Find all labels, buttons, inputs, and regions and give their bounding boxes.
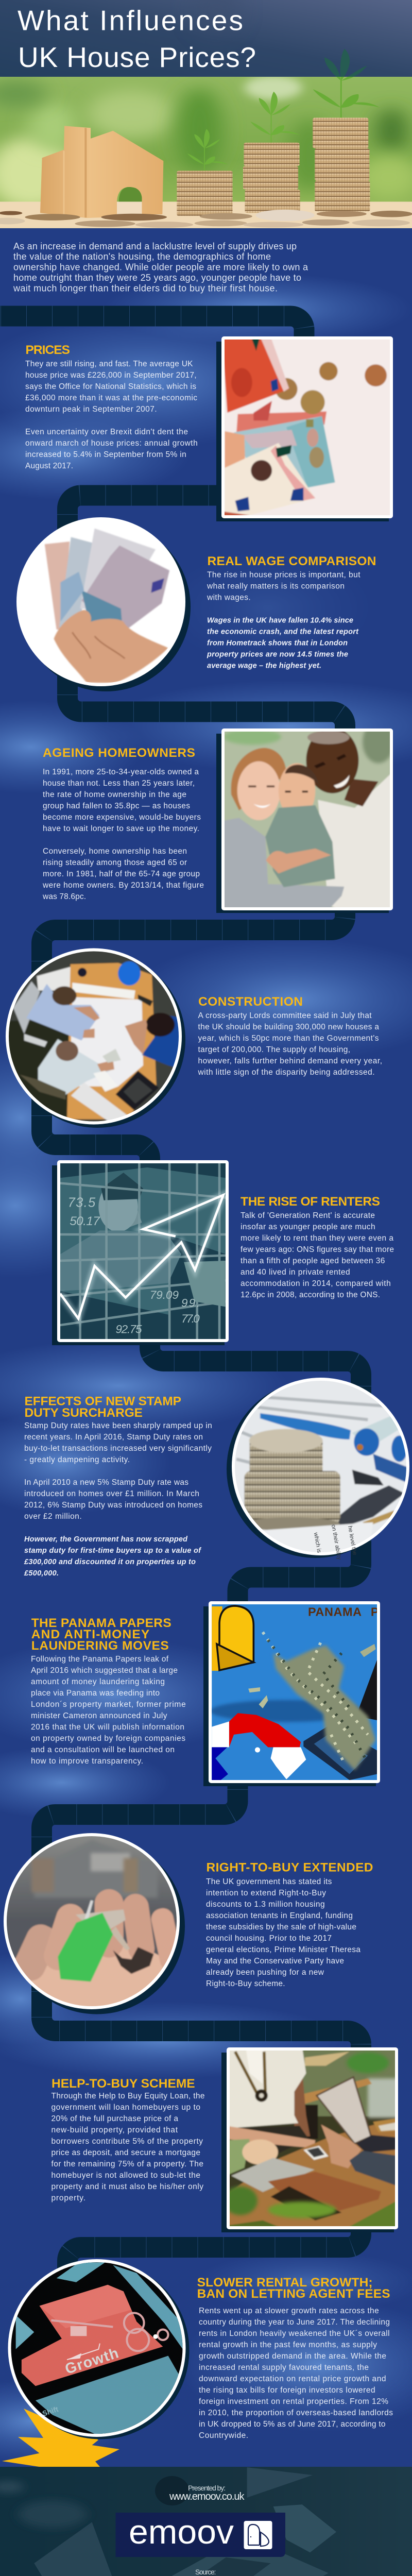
text block: prices: onward march of house prices: annual growth (25, 439, 198, 448)
text block: right-to-buy extended: intention to extend Right-to-Buy (206, 1889, 326, 1897)
heading: ageing homeowners: AGEING HOMEOWNERS (43, 746, 195, 760)
text block: stamp duty: recent years. In April 2016, Stamp Duty rates on (24, 1433, 203, 1442)
text block: ageing homeowners (42, 768, 204, 901)
text block: panama papers: on property owned by foreign companies (31, 1734, 185, 1743)
panel: right-to-buy extended (0, 1829, 373, 2024)
text block: prices: downturn peak in September 2007. (25, 405, 157, 414)
text block: construction: with little sign of the disparity being addressed. (198, 1068, 375, 1077)
heading: help-to-buy scheme: HELP-TO-BUY SCHEME (52, 2077, 195, 2091)
text block: prices: August 2017. (25, 462, 73, 470)
text block: prices: house price was £226,000 in September 2017, (25, 371, 197, 380)
text block: right-to-buy extended (206, 1877, 360, 1988)
text block: help-to-buy scheme: property. (52, 2194, 85, 2202)
text block: stamp duty: However, the Government has now scrapped (24, 1535, 188, 1544)
heading: panama papers: LAUNDERING MOVES (31, 1639, 169, 1653)
logo: emoov (115, 2513, 285, 2557)
text block: ageing homeowners: house than not. Less than 25 years later, (43, 779, 195, 788)
text block: panama papers: amount of money laundering taking (31, 1677, 165, 1686)
intro text: wait much longer than their elders did to buy their first house. (13, 283, 278, 294)
text block: stamp duty: introduced on homes over £1 million. In March (24, 1489, 199, 1498)
text block: panama papers: how to improve transparency. (31, 1757, 143, 1766)
intro text: ownership have changed. While older people are more likely to own a (13, 262, 308, 272)
text block: the rise of renters: more likely to rent than they were even a (241, 1234, 393, 1243)
text block: real wage comparison: from Hometrack shows that in London (207, 639, 348, 647)
text block: help-to-buy scheme: borrowers contribute 5% of the property (52, 2137, 203, 2146)
text block: right-to-buy extended: May and the Conservative Party have (206, 1957, 344, 1965)
text block: real wage comparison: Wages in the UK have fallen 10.4% since (207, 616, 353, 624)
source list: Source: (195, 2568, 216, 2576)
text block: help-to-buy scheme: price as deposit, and secure a mortgage (52, 2148, 200, 2157)
heading: right-to-buy extended: RIGHT-TO-BUY EXTENDED (206, 1861, 373, 1875)
title: UK House Prices? (18, 41, 256, 73)
caption fragments on paper: he level the (347, 1526, 358, 1555)
text block: stamp duty: over £2 million. (24, 1512, 82, 1521)
heading: stamp duty: DUTY SURCHARGE (25, 1406, 143, 1420)
text block: panama papers: 2016 that the UK will publish information (31, 1723, 184, 1732)
text block: construction (198, 1011, 382, 1077)
text block: slower rental growth: increased rental supply favoured tenants, the (199, 2363, 369, 2372)
intro text: As an increase in demand and a lacklustre level of supply drives up (13, 241, 297, 251)
text block: slower rental growth: downward expectation on rental price growth and (199, 2375, 386, 2383)
image: architects around a table (0, 944, 189, 1131)
panel: construction (0, 944, 382, 1131)
image: hand holding house keys (0, 1829, 186, 2024)
text block: stamp duty: - greatly dampening activity. (24, 1455, 130, 1464)
image: growth key on keyboard: Growth (63, 2345, 121, 2378)
image: hand holding euro notes (16, 517, 191, 691)
presented by text (169, 2484, 245, 2502)
presented by text: Presented by: (188, 2484, 226, 2492)
panel: prices (25, 336, 393, 521)
text block: prices: increased to 5.4% in September from 5% in (25, 450, 186, 459)
title: What Influences (18, 4, 243, 36)
text block: prices: £36,000 more than it was at the pre-economic (25, 394, 197, 402)
text block: panama papers: London´s property market, former prime (31, 1700, 186, 1709)
text block: the rise of renters: and 40 lived in private rented (241, 1268, 350, 1277)
image: coin stack and pens (226, 1370, 412, 1562)
image: man with stock chart and rising arrow: 77.0 (181, 1312, 200, 1325)
text block: the rise of renters: insofar as younger people are much (241, 1223, 375, 1231)
text block: help-to-buy scheme: government will loan homebuyers up to (52, 2103, 200, 2112)
intro text: the value of the nation's housing, the demographics of home (13, 251, 271, 262)
image: man with stock chart and rising arrow: 99. (181, 1296, 200, 1309)
heading: slower rental growth (197, 2276, 390, 2301)
heading: panama papers: THE PANAMA PAPERS (31, 1616, 171, 1630)
image: euro notes and coins (216, 336, 393, 521)
text block: construction: however, falls further behind demand every year, (198, 1057, 382, 1065)
image: growth key on keyboard: Shift (41, 2405, 60, 2418)
image: growth key on keyboard (5, 2257, 189, 2441)
text block: stamp duty: Stamp Duty rates have been sharply ramped up in (24, 1421, 212, 1430)
starburst badge (2, 2409, 119, 2467)
title band (0, 0, 412, 77)
text block: help-to-buy scheme: property and it must also be his/her only (52, 2182, 203, 2191)
text block: stamp duty: In April 2010 a new 5% Stamp Duty rate was (24, 1478, 188, 1487)
heading: stamp duty: EFFECTS OF NEW STAMP (25, 1394, 181, 1409)
panel: help-to-buy scheme (52, 2047, 400, 2232)
text block: stamp duty: £500,000. (24, 1569, 59, 1578)
text block: construction: the UK should be building 300,000 new houses a (198, 1023, 379, 1031)
text block: help-to-buy scheme: 20% of the full purchase price of a (52, 2114, 178, 2123)
text block: right-to-buy extended: Right-to-Buy scheme. (206, 1979, 285, 1988)
panel: ageing homeowners (42, 721, 394, 913)
text block: the rise of renters: 12.6pc in 2008, according to the ONS. (241, 1291, 380, 1299)
text block: panama papers: April 2016 which suggested that a large (31, 1666, 178, 1675)
text block: the rise of renters (241, 1211, 394, 1299)
text block: help-to-buy scheme: Through the Help to Buy Equity Loan, the (52, 2092, 205, 2100)
text block: slower rental growth: rents in London heavily weakened the UK´s overall (199, 2329, 390, 2338)
text block: slower rental growth: in UK dropped to 5% as of June 2017, according to (199, 2420, 385, 2429)
text block: panama papers: Following the Panama Papers leak of (31, 1655, 169, 1664)
text block: ageing homeowners: the rate of home ownership in the age (43, 790, 186, 799)
heading: real wage comparison: REAL WAGE COMPARISON (207, 554, 376, 568)
text block: slower rental growth: Countrywide. (199, 2431, 248, 2440)
text block: stamp duty: £300,000 and discounted it on properties up to (24, 1558, 196, 1566)
icon: seedlings (187, 49, 380, 171)
text block: right-to-buy extended: discounts to 1.3 million housing (206, 1900, 325, 1909)
footer background: darkened laptop photo (0, 2467, 412, 2576)
caption fragments on paper (313, 1524, 358, 1561)
intro text (13, 241, 308, 294)
image: smiling family (216, 721, 394, 913)
icon: wooden house (40, 126, 163, 218)
logo: emoov: emoov (129, 2513, 234, 2551)
image: man with stock chart and rising arrow: 92.75 (115, 1323, 142, 1335)
text block: prices: says the Office for National Statistics, which is (25, 382, 196, 391)
text block: right-to-buy extended: The UK government has stated its (206, 1877, 332, 1886)
heading: slower rental growth: SLOWER RENTAL GROWTH; (197, 2276, 373, 2290)
text block: help-to-buy scheme: homebuyer is not allowed to sub-let the (52, 2171, 200, 2180)
icon: coin stacks (177, 118, 370, 216)
panel: effects of new stamp duty surcharge (24, 1370, 412, 1578)
text block: slower rental growth: country during the year to June 2017. The declining (199, 2318, 390, 2327)
text block: stamp duty: 2012, 6% Stamp Duty was introduced on homes (24, 1501, 202, 1510)
text block: right-to-buy extended: council housing. Prior to the 2017 (206, 1934, 332, 1943)
text block: ageing homeowners: group had fallen to 35.8pc — as houses (43, 802, 190, 810)
loose coins on table (0, 210, 412, 228)
panel: slower rental growth (5, 2257, 393, 2441)
text block: slower rental growth: foreign investment on rental properties. From 12% (199, 2397, 388, 2406)
text block: ageing homeowners: become more expensive, would-be buyers (43, 813, 201, 822)
text block: slower rental growth: rental growth in the past few months, as supply (199, 2341, 377, 2349)
text block: real wage comparison: average wage – the highest yet. (207, 662, 321, 670)
text block: right-to-buy extended: association tenants in England, funding (206, 1911, 353, 1920)
heading: panama papers: AND ANTI-MONEY (31, 1628, 149, 1641)
text block: slower rental growth: growth outstripped demand in the area. While the (199, 2352, 386, 2361)
icon: door (244, 2521, 272, 2549)
text block: help-to-buy scheme: new-build property, provided that (52, 2126, 178, 2134)
text block: construction: A cross-party Lords committee said in July that (198, 1011, 372, 1020)
text block: stamp duty: buy-to-let transactions increased very significantly (24, 1444, 212, 1453)
title (18, 4, 256, 73)
text block: ageing homeowners: In 1991, more 25-to-34-year-olds owned a (43, 768, 199, 776)
image: man with stock chart and rising arrow: 79.09 (150, 1289, 179, 1301)
hero photo: wooden house and coin stacks (0, 77, 412, 228)
text block: stamp duty (24, 1421, 212, 1578)
image: man with stock chart and rising arrow: 50.17 (70, 1214, 100, 1228)
text block: the rise of renters: Talk of 'Generation Rent' is accurate (241, 1211, 375, 1220)
image: man with stock chart and rising arrow: 73.5 (68, 1195, 96, 1210)
heading: panama papers (31, 1616, 171, 1653)
text block: real wage comparison: what really matters is its comparison (207, 582, 345, 590)
heading: slower rental growth: BAN ON LETTING AGENT FEES (197, 2287, 390, 2301)
text block: slower rental growth (199, 2307, 393, 2440)
caption fragments on paper: on their ability (330, 1524, 342, 1561)
image: man with stock chart and rising arrow (52, 1160, 229, 1345)
winding road path (0, 316, 361, 2429)
text block: the rise of renters: than a fifth of people aged between 36 (241, 1257, 385, 1265)
heading: construction: CONSTRUCTION (198, 995, 303, 1009)
caption fragments on paper: which is (313, 1532, 322, 1553)
text block: real wage comparison (207, 571, 360, 670)
intro text: home outright than they were 25 years ago, younger people have to (13, 273, 301, 283)
text block: help-to-buy scheme: for the remaining 75% of a property. The (52, 2160, 203, 2168)
text block: construction: year, which is 50pc more than the Government's (198, 1034, 379, 1043)
text block: ageing homeowners: were home owners. By 2013/14, that figure (42, 881, 204, 890)
text block: panama papers: minister Cameron announced in July (31, 1711, 167, 1720)
text block: prices: They are still rising, and fast. The average UK (25, 360, 193, 368)
text block: real wage comparison: the economic crash, and the latest report (207, 628, 359, 636)
text block: slower rental growth: in 2010, the proportion of overseas-based landlords (199, 2409, 393, 2417)
text block: prices (25, 360, 198, 470)
text block: right-to-buy extended: already been pushing for a new (206, 1968, 324, 1977)
text block: panama papers (31, 1655, 186, 1766)
text block: panama papers: place via Panama was feeding into (31, 1689, 160, 1698)
text block: prices: Even uncertainty over Brexit didn't dent the (25, 428, 188, 436)
text block: right-to-buy extended: these subsidies by the sale of high-value (206, 1923, 356, 1931)
presented by text: www.emoov.co.uk (169, 2491, 245, 2502)
image: money flying out of a briefcase over Panama: PANAMA (308, 1605, 362, 1618)
image: business meeting with laptop (221, 2047, 400, 2232)
text block: help-to-buy scheme (52, 2092, 205, 2202)
heading: stamp duty (25, 1394, 181, 1420)
text block: real wage comparison: with wages. (207, 594, 251, 602)
icon: seedling tip over title band (324, 49, 367, 77)
text block: real wage comparison: property prices are now 14.5 times the (207, 650, 348, 658)
heading: the rise of renters: THE RISE OF RENTERS (241, 1195, 380, 1209)
text block: ageing homeowners: rising steadily among those aged 65 or (43, 858, 187, 867)
text block: slower rental growth: Rents went up at slower growth rates across the (199, 2307, 379, 2315)
text block: ageing homeowners: have to wait longer to save up the money. (43, 824, 199, 833)
panel: the rise of renters (52, 1160, 394, 1345)
text block: the rise of renters: few years ago: ONS figures say that more (241, 1245, 394, 1254)
text block: right-to-buy extended: general elections, Prime Minister Theresa (206, 1945, 360, 1954)
text block: ageing homeowners: was 78.6pc. (42, 892, 86, 901)
panel: real wage comparison (16, 517, 376, 691)
text block: panama papers: and a consultation will be launched on (31, 1745, 175, 1754)
image: money flying out of a briefcase over Panama (203, 1601, 380, 1786)
text block: the rise of renters: accommodation in 2014, compared with (241, 1279, 391, 1288)
text block: stamp duty: stamp duty for first-time buyers up to a value of (24, 1547, 202, 1555)
text block: slower rental growth: the rising tax bills for foreign investors lowered (199, 2386, 375, 2395)
text block: construction: target of 200,000. The supply of housing, (198, 1045, 350, 1054)
text block: ageing homeowners: more. In 1981, half of the 65-74 age group (43, 870, 200, 878)
heading: prices: PRICES (26, 343, 70, 357)
image: money flying out of a briefcase over Panama: P (371, 1605, 379, 1618)
panel: panama papers (31, 1601, 380, 1786)
text block: ageing homeowners: Conversely, home ownership has been (43, 847, 187, 856)
text block: real wage comparison: The rise in house prices is important, but (207, 571, 360, 579)
